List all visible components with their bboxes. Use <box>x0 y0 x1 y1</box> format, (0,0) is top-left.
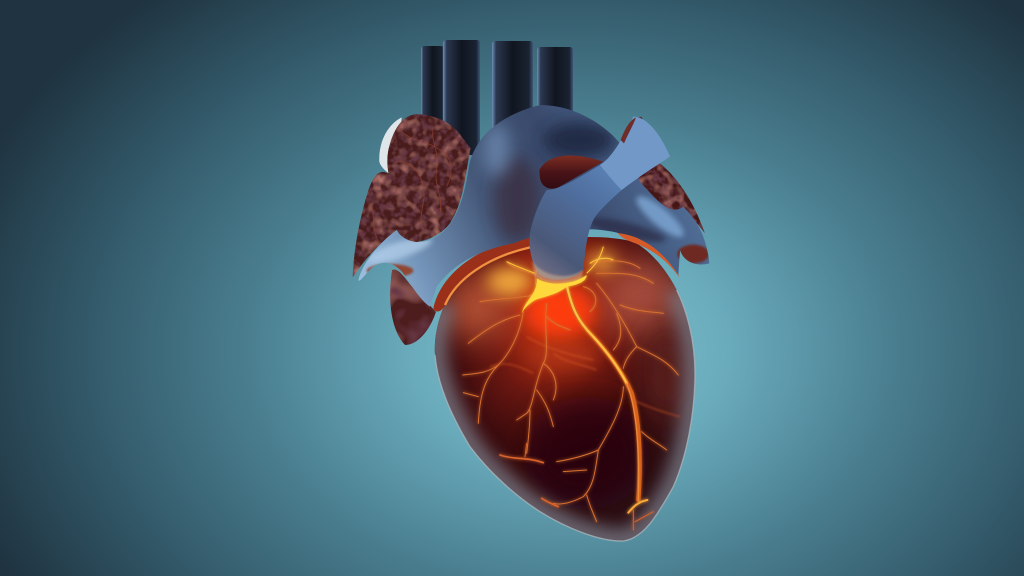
blue vessel structure <box>358 105 709 307</box>
dark core shading <box>493 157 540 243</box>
pulmonary band <box>600 117 670 190</box>
left arm highlight <box>368 238 434 264</box>
red core glow <box>525 287 595 337</box>
muscle fibres <box>490 337 680 417</box>
descending coronary lower core <box>627 383 639 500</box>
mid orange band <box>527 340 600 370</box>
grey glass rim shade <box>435 290 695 541</box>
pulmonary base glow <box>532 260 583 284</box>
heart outer rim <box>435 290 695 541</box>
yellow glow upper left <box>487 267 533 297</box>
right tip warm shade <box>677 245 709 263</box>
heart shading and glow <box>435 250 695 541</box>
tube 4 <box>537 47 573 117</box>
opening behind pulmonary artery <box>539 155 603 189</box>
lung tissue <box>353 114 705 277</box>
vessel tubes <box>421 40 573 155</box>
left lung lobes <box>353 114 471 277</box>
left lobe veins <box>370 127 451 243</box>
bright yellow junction under pulmonary artery <box>507 247 613 313</box>
right lower shade <box>591 216 667 244</box>
tube 2 <box>443 40 480 155</box>
heart <box>433 232 695 541</box>
upper arch shadow <box>543 122 617 158</box>
right mid brown tint <box>643 320 690 427</box>
yellow glow upper right <box>587 250 617 273</box>
white highlight on lobe <box>379 117 402 180</box>
band inner opening <box>621 117 636 143</box>
heart body <box>435 237 695 541</box>
dark core <box>523 397 650 510</box>
right lobe <box>621 117 705 233</box>
lower left lung lobe <box>390 269 436 345</box>
descending coronary outer <box>567 285 640 500</box>
junction glow <box>522 275 587 313</box>
left tip warm shade <box>367 264 413 277</box>
orange top contour <box>445 247 530 305</box>
tube 3 <box>492 41 533 131</box>
secondary branches <box>463 261 678 522</box>
orange left contour band <box>433 236 530 312</box>
main bright vessels <box>463 261 678 530</box>
aortic arch body <box>358 105 709 307</box>
right arm highlight <box>634 194 686 240</box>
upper-left muscle tint <box>443 273 510 340</box>
right top band <box>617 232 679 277</box>
lower glowing patches <box>500 443 653 530</box>
tube 1 <box>421 46 444 131</box>
upper-right muscle tint <box>600 257 687 337</box>
upper highlight <box>483 123 510 177</box>
arch shading <box>366 122 709 277</box>
descending coronary core <box>567 285 627 383</box>
branching yellow twigs <box>507 247 613 273</box>
pulmonary artery <box>530 117 670 280</box>
